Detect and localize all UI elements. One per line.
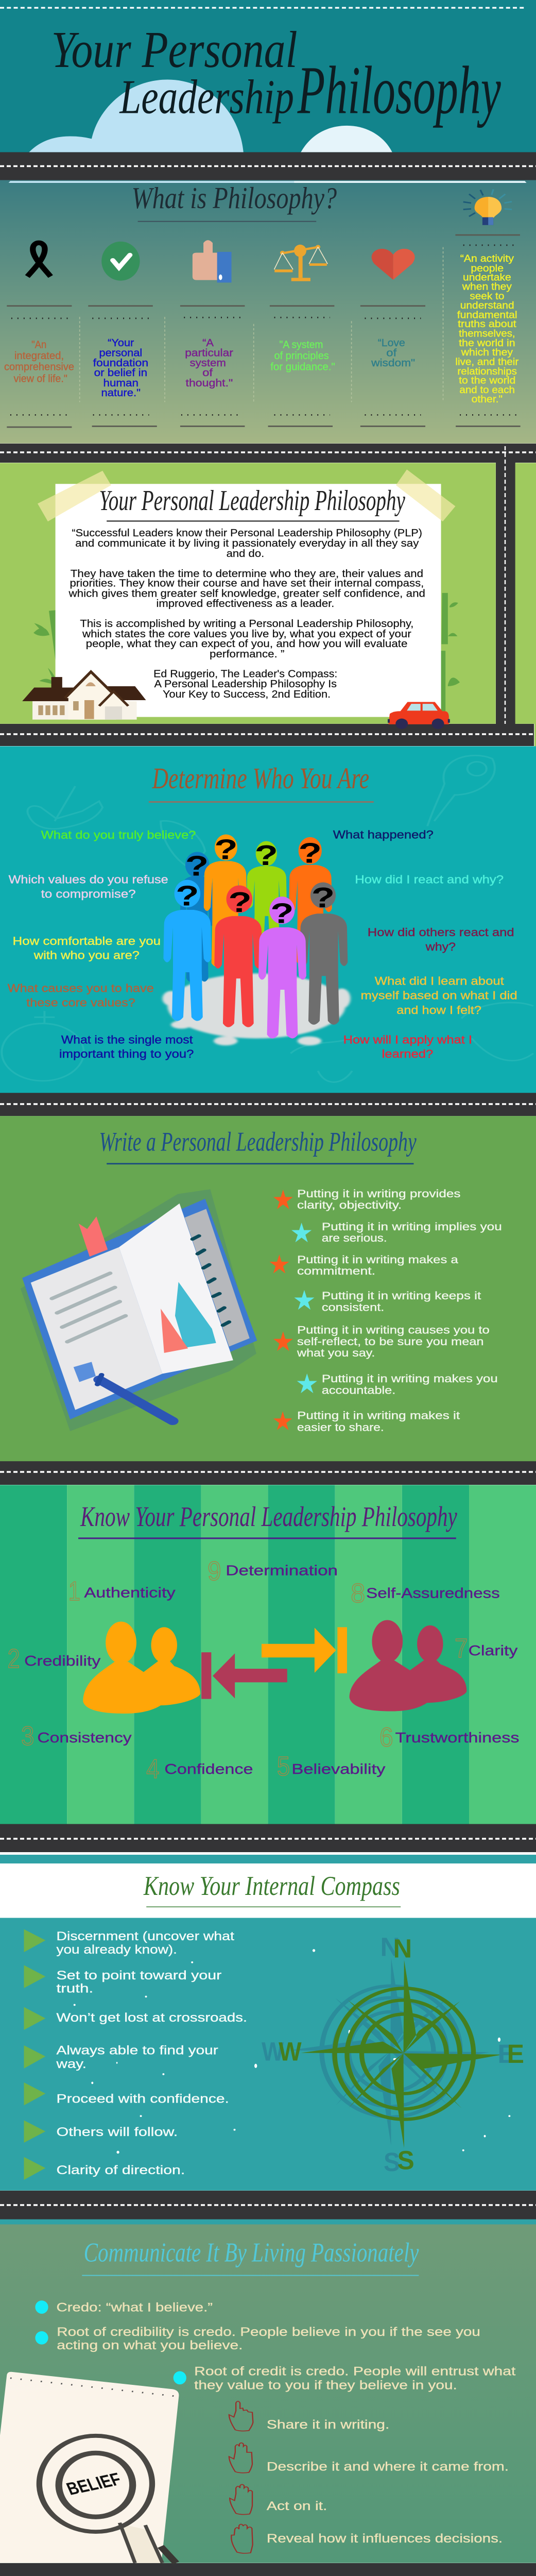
action: share <box>229 2401 389 2432</box>
questions: what happened: How did I react and why? <box>355 873 504 886</box>
illustration: compass: N <box>380 1932 400 1962</box>
outlined numbers: 3 <box>21 1721 34 1751</box>
icon: crimson people <box>350 1620 466 1711</box>
definition: personal foundation: human <box>103 377 139 389</box>
quote text: Your Key to Success, 2nd Edition. <box>163 688 331 700</box>
definition: an activity: the world in <box>459 338 515 349</box>
leadership traits: Self-Assuredness <box>366 1585 500 1601</box>
outlined numbers <box>8 1556 468 1784</box>
definition: integrated view: integrated, <box>14 349 64 361</box>
reason 2: Putting it in writing implies you <box>322 1220 502 1233</box>
illustration: group of people: ? <box>176 880 199 911</box>
arrow: crimson left <box>201 1652 287 1699</box>
definition: system of principles: for guidance." <box>270 361 335 372</box>
illustration: compass: S <box>397 2145 414 2175</box>
outlined numbers: 6 <box>379 1722 393 1753</box>
quote text: improved effectiveness as a leader. <box>156 598 334 609</box>
leadership traits: Clarity <box>469 1643 518 1658</box>
panel: determine who you are <box>0 721 536 1093</box>
quote text: priorities. They know their course and have set their internal compass, <box>70 578 424 589</box>
icon: scales <box>274 245 327 281</box>
heading: what is philosophy: What is Philosophy? <box>132 181 337 215</box>
reason 1: Putting it in writing provides <box>297 1188 460 1200</box>
arrow: orange right <box>262 1627 347 1673</box>
questions: who you are <box>8 828 196 1060</box>
compass traits list: Clarity of direction. <box>57 2163 185 2177</box>
action: share: Share it in writing. <box>267 2418 389 2432</box>
definition: an activity: when they <box>462 281 512 292</box>
compass traits list: Others will follow. <box>57 2125 178 2139</box>
definition: an activity: undertake <box>463 273 511 283</box>
definition: an activity: truths about <box>458 319 516 330</box>
panel: write a personal leadership philosophy <box>0 1116 536 1461</box>
reason 7: easier to share. <box>297 1421 384 1433</box>
action: act <box>230 2484 327 2515</box>
leadership traits: Believability <box>291 1761 386 1777</box>
icon: house <box>22 670 146 720</box>
questions: who you are: What causes you to have <box>8 981 154 994</box>
definition: integrated view: "An <box>31 338 46 350</box>
quote text: which states the core values you live by, what you expect of your <box>82 628 411 639</box>
quote text <box>68 527 425 700</box>
definition: an activity: other." <box>472 394 503 404</box>
compass traits list: Proceed with confidence. <box>57 2092 229 2106</box>
definition: love of wisdom: “Love <box>378 336 405 349</box>
reason 5: Putting it in writing causes you to <box>297 1324 490 1336</box>
definition: system of thought: particular <box>185 347 233 359</box>
definition: an activity: fundamental <box>457 310 517 320</box>
compass traits list: Set to point toward your <box>57 1969 221 1982</box>
panel: know your internal compass <box>0 1855 536 2226</box>
illustration: group of people: ? <box>214 834 238 865</box>
outlined numbers: 4 <box>146 1754 159 1784</box>
definition: personal foundation <box>93 336 148 399</box>
illustration: group of people: ? <box>255 840 278 871</box>
definition: an activity: relationships <box>457 366 517 377</box>
definition: personal foundation: or belief in <box>94 366 147 379</box>
definition: system of thought <box>185 336 233 389</box>
questions: who you are: Which values do you refuse <box>9 873 168 886</box>
compass traits list: Always able to find your <box>57 2043 218 2057</box>
definition: love of wisdom: of <box>386 347 397 359</box>
illustration: open book and pen <box>21 1189 257 1431</box>
illustration: compass: E <box>507 2039 524 2069</box>
panel: what is philosophy <box>0 180 536 444</box>
reason 5: what you say. <box>297 1347 375 1359</box>
definition: system of thought: “A <box>202 336 214 349</box>
outlined numbers: 8 <box>351 1579 365 1608</box>
icon: large cloud <box>29 79 244 152</box>
questions: what happened: What did I learn about <box>375 974 504 987</box>
questions: what happened: why? <box>425 940 456 953</box>
quote text: performance. ” <box>210 648 284 659</box>
illustration: group of people: ? <box>312 882 335 913</box>
definition: an activity: live, and their <box>455 357 518 367</box>
reason 4: consistent. <box>322 1301 384 1314</box>
questions: who you are: What do you truly believe? <box>41 828 196 841</box>
markers: green triangles <box>24 1929 45 2180</box>
definition: an activity: people <box>471 263 504 274</box>
reason 1 <box>273 1188 460 1211</box>
questions: what happened: How will I apply what I <box>343 1033 472 1046</box>
icon: small cloud <box>301 126 392 152</box>
quote text: Ed Ruggerio, The Leader's Compass: <box>153 668 337 680</box>
leadership traits: Trustworthiness <box>395 1730 520 1745</box>
leadership traits: Determination <box>226 1563 338 1578</box>
definition: an activity <box>455 253 518 404</box>
illustration: compass: N <box>393 1934 412 1963</box>
illustration: compass: W <box>262 2037 284 2066</box>
leadership traits: Authenticity <box>84 1585 176 1601</box>
outlined numbers: 9 <box>208 1556 221 1586</box>
outlined numbers: 1 <box>68 1577 80 1606</box>
reason 2 <box>291 1220 502 1244</box>
illustration: compass: W <box>279 2037 302 2066</box>
illustration: group of people: ? <box>270 897 294 929</box>
reason 4 <box>294 1290 481 1314</box>
reason 7: Putting it in writing makes it <box>297 1409 460 1421</box>
action: reveal <box>231 2524 503 2553</box>
definition: an activity: understand <box>460 300 514 311</box>
illustration: group of people: ? <box>228 887 252 918</box>
leadership traits: Confidence <box>164 1761 253 1777</box>
icon: light bulb <box>463 189 512 225</box>
quote text: and do. <box>227 548 264 559</box>
definition: personal foundation: personal <box>99 347 142 359</box>
bullet list: credo: Credo: “what I believe.” <box>57 2300 213 2314</box>
definition: system of principles: "A system <box>279 338 323 350</box>
reason 1: clarity, objectivity. <box>297 1199 402 1211</box>
reason 3 <box>270 1253 458 1277</box>
paper note <box>38 469 455 717</box>
bullet list: credo: acting on what you believe. <box>57 2338 243 2352</box>
questions: who you are: How comfortable are you <box>13 935 161 947</box>
definition: an activity: to the world <box>459 376 515 386</box>
definition: personal foundation: “Your <box>108 336 134 349</box>
bullet list: credo <box>35 2300 516 2392</box>
quote text: “Successful Leaders know their Personal Leadership Philosophy (PLP) <box>72 527 422 539</box>
compass traits list: you already know). <box>57 1943 177 1956</box>
definition: an activity: and to each <box>459 385 515 396</box>
definition: integrated view <box>4 338 74 384</box>
compass traits list: Discernment (uncover what <box>57 1929 235 1943</box>
compass traits list <box>56 1929 247 2177</box>
panel: personal leadership philosophy note <box>0 463 536 746</box>
compass traits list: way. <box>56 2057 87 2071</box>
questions: who you are: to compromise? <box>41 888 136 901</box>
reason 6: Putting it in writing makes you <box>322 1372 498 1385</box>
definition: system of thought: of <box>202 366 213 379</box>
compass traits list: truth. <box>57 1982 93 1995</box>
illustration: group of people: ? <box>299 837 322 869</box>
column rules <box>7 234 521 428</box>
definition: personal foundation: foundation <box>93 357 148 369</box>
title: Your Personal <box>51 22 298 78</box>
outlined numbers: 7 <box>455 1633 468 1664</box>
leadership traits: Consistency <box>37 1730 132 1745</box>
illustration: group of people <box>162 834 351 1045</box>
questions: what happened: learned? <box>382 1047 433 1060</box>
illustration: note with magnifying glass: BELIEF <box>63 2469 124 2499</box>
outlined numbers: 2 <box>8 1643 20 1674</box>
definition: system of principles: of principles <box>274 349 329 361</box>
questions: who you are: important thing to you? <box>59 1047 194 1060</box>
reason 5: self-reflect, to be sure you mean <box>297 1335 484 1348</box>
questions: who you are: with who you are? <box>33 948 140 961</box>
compass traits list: Won’t get lost at crossroads. <box>57 2011 247 2025</box>
definition: system of thought: system <box>190 357 226 369</box>
panel: header <box>0 0 536 152</box>
quote text: and communicate it by living it passionately everyday in all they say <box>75 537 419 549</box>
quote text: This is accomplished by writing a Personal Leadership Philosophy, <box>80 618 413 630</box>
illustration: compass: S <box>384 2147 400 2177</box>
reason 5 <box>273 1324 490 1359</box>
title: Leadership <box>119 70 294 124</box>
bullet list: credo: they value to you if they believe in you. <box>194 2378 457 2392</box>
reason 6 <box>297 1372 498 1396</box>
questions: who you are: these core values? <box>26 996 135 1009</box>
leadership traits <box>24 1563 520 1777</box>
reason 4: Putting it in writing keeps it <box>322 1290 481 1302</box>
bullet list: credo: Root of credibility is credo. People believe in you if the see you <box>57 2325 480 2339</box>
reason 3: Putting it in writing makes a <box>297 1253 458 1266</box>
reason 3: commitment. <box>297 1265 375 1277</box>
quote text: which gives them greater self knowledge, greater self confidence, and <box>68 587 425 599</box>
action: describe <box>229 2443 509 2473</box>
questions: what happened <box>333 828 517 1060</box>
definition: integrated view: comprehensive <box>4 361 74 372</box>
definition: system of thought: thought." <box>186 377 233 389</box>
icon: orange people <box>83 1621 200 1714</box>
illustration: group of people: ? <box>185 850 209 882</box>
definition: an activity: which they <box>461 347 513 358</box>
icon: heart <box>372 249 415 280</box>
quote text: They have taken the time to determine who they are, their values and <box>71 568 423 579</box>
illustration: note with magnifying glass <box>0 2372 179 2563</box>
definition: an activity: seek to <box>470 291 504 301</box>
reason 2: are serious. <box>322 1232 387 1244</box>
definition: an activity: “An activity <box>460 253 514 264</box>
quote text: A Personal Leadership Philosophy Is <box>154 678 337 689</box>
definition: love of wisdom: wisdom" <box>371 357 415 369</box>
title <box>51 22 501 128</box>
questions: who you are: What is the single most <box>61 1033 193 1046</box>
illustration: compass: E <box>497 2039 516 2069</box>
panel: communicate it by living passionately <box>0 2219 536 2563</box>
panel: know your personal leadership philosophy <box>0 1485 536 1824</box>
reason 7 <box>273 1409 460 1433</box>
action: act: Act on it. <box>267 2499 327 2513</box>
reason 6: accountable. <box>322 1384 395 1396</box>
definition: an activity: themselves, <box>459 329 515 339</box>
definition: system of principles <box>270 338 335 372</box>
illustration: compass <box>262 1932 524 2177</box>
outlined numbers: 5 <box>277 1751 290 1782</box>
leadership traits: Credibility <box>24 1653 101 1669</box>
icon: red car <box>388 702 450 729</box>
icon: green check <box>101 242 140 281</box>
icon: black ribbon <box>27 243 50 277</box>
definition: love of wisdom <box>371 336 415 369</box>
quote text: people, what they can expect of you, and how you will evaluate <box>86 638 407 649</box>
questions: what happened: What happened? <box>333 828 434 841</box>
bamboo <box>33 593 460 711</box>
icon: thumbs up <box>193 240 232 283</box>
definition: personal foundation: nature." <box>101 386 141 399</box>
definition: integrated view: view of life." <box>14 372 67 384</box>
action: reveal: Reveal how it influences decisions. <box>267 2532 503 2545</box>
questions: what happened: and how I felt? <box>396 1004 481 1016</box>
